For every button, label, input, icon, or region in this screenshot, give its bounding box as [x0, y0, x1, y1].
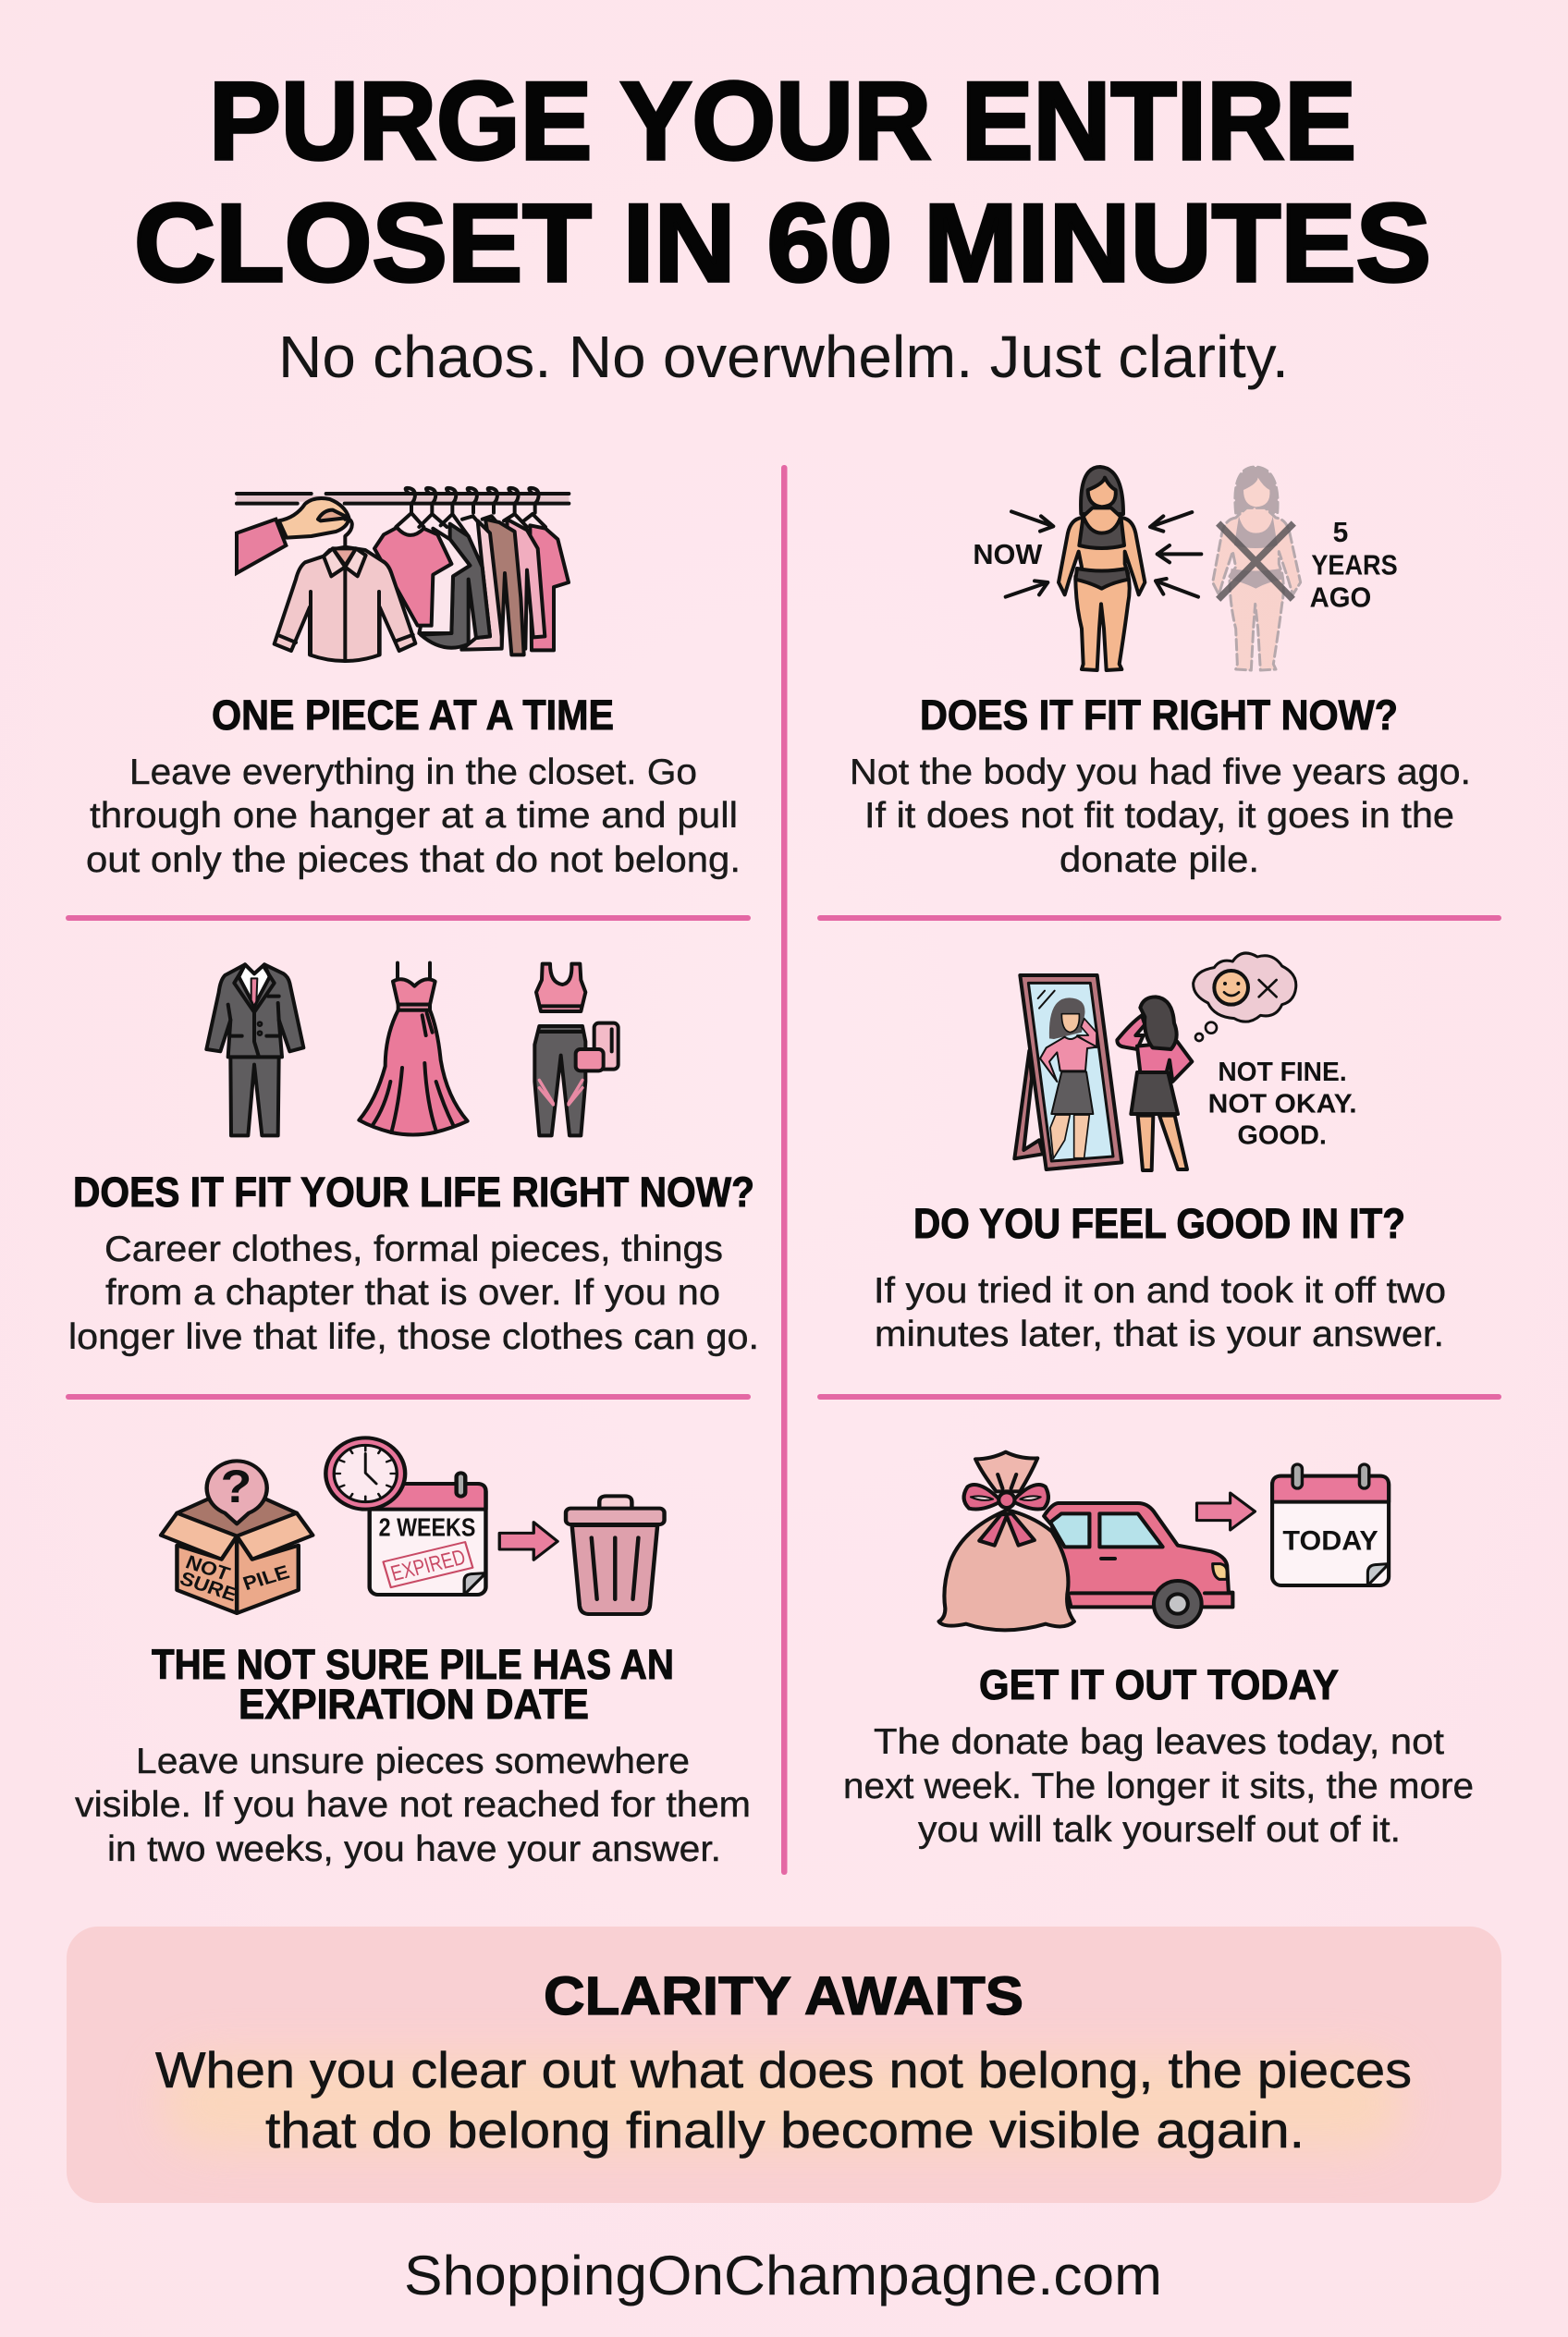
body text: Leave unsure pieces somewhere [136, 1742, 690, 1781]
body text: The donate bag leaves today, not [874, 1722, 1444, 1762]
body text: minutes later, that is your answer. [875, 1315, 1444, 1354]
callout text: When you clear out what does not belong, the pieces [155, 2041, 1412, 2098]
icon: donation bag, car, arrow and today calendar [938, 1452, 1389, 1630]
body text [68, 1230, 759, 1357]
heading: DO YOU FEEL GOOD IN IT? [913, 1200, 1405, 1247]
heading: GET IT OUT TODAY [979, 1661, 1339, 1708]
panel: not sure pile [75, 1438, 751, 1869]
heading [152, 1641, 674, 1728]
callout text [155, 2041, 1412, 2159]
panel: does it fit your life [68, 963, 759, 1357]
panel: do you feel good in it [874, 953, 1446, 1354]
horizontal divider row 2 left [66, 1394, 751, 1400]
horizontal divider row 1 left [66, 915, 751, 921]
body text: next week. The longer it sits, the more [843, 1767, 1474, 1806]
body text: longer live that life, those clothes can go. [68, 1317, 759, 1357]
body text: Not the body you had five years ago. [850, 752, 1471, 792]
icon: box, expiring calendar, arrow and trash can: ? [220, 1462, 251, 1512]
website footer: ShoppingOnChampagne.com [404, 2245, 1162, 2306]
body text [874, 1271, 1446, 1354]
icon: box, expiring calendar, arrow and trash can: 2 WEEKS [379, 1514, 475, 1542]
icon: body now versus five years ago [973, 467, 1398, 670]
vertical divider [781, 465, 788, 1875]
icon: body now versus five years ago: NOW [973, 539, 1042, 570]
body text: through one hanger at a time and pull [90, 796, 738, 836]
icon: box, expiring calendar, arrow and trash can: SURE [177, 1567, 240, 1606]
horizontal divider row 1 right [817, 915, 1501, 921]
panel: get it out today [843, 1452, 1474, 1850]
panel: does it fit right now [850, 467, 1471, 880]
heading: THE NOT SURE PILE HAS AN [152, 1641, 674, 1688]
heading: DOES IT FIT RIGHT NOW? [920, 691, 1398, 739]
icon: donation bag, car, arrow and today calendar: TODAY [1282, 1525, 1378, 1557]
icon: woman at mirror with thought bubble: NOT OKAY. [1208, 1089, 1357, 1119]
horizontal divider row 2 right [817, 1394, 1501, 1400]
title: PURGE YOUR ENTIRE [209, 59, 1356, 183]
body text: out only the pieces that do not belong. [86, 840, 741, 880]
icon: hand pulling shirt from rail [237, 488, 569, 661]
body text [843, 1722, 1474, 1850]
icon: body now versus five years ago: 5 [1333, 517, 1348, 548]
body text: Leave everything in the closet. Go [129, 752, 697, 792]
body text: in two weeks, you have your answer. [107, 1829, 721, 1869]
icon: body now versus five years ago: YEARS [1311, 550, 1398, 581]
icon: box, expiring calendar, arrow and trash can: EXPIRED [388, 1546, 469, 1586]
body text: If it does not fit today, it goes in the [864, 796, 1454, 836]
icon: woman at mirror with thought bubble [1014, 953, 1357, 1170]
title: CLOSET IN 60 MINUTES [134, 181, 1431, 305]
icon: suit, gown and activewear [206, 963, 619, 1135]
body text: you will talk yourself out of it. [918, 1810, 1401, 1850]
icon: woman at mirror with thought bubble: GOOD. [1237, 1120, 1327, 1150]
body text: Career clothes, formal pieces, things [104, 1230, 723, 1269]
icon: box, expiring calendar, arrow and trash can: PILE [239, 1560, 292, 1595]
body text: donate pile. [1060, 840, 1259, 880]
heading: DOES IT FIT YOUR LIFE RIGHT NOW? [73, 1168, 754, 1216]
body text: from a chapter that is over. If you no [105, 1273, 720, 1313]
icon: box, expiring calendar, arrow and trash can: NOT [183, 1550, 234, 1585]
title [134, 59, 1431, 305]
body text [850, 752, 1471, 880]
callout heading: CLARITY AWAITS [544, 1966, 1023, 2026]
callout: clarity awaits [67, 1927, 1501, 2203]
callout text: that do belong finally become visible again. [265, 2101, 1305, 2159]
body text [75, 1742, 751, 1869]
body text: If you tried it on and took it off two [874, 1271, 1446, 1311]
heading: EXPIRATION DATE [239, 1681, 589, 1728]
icon: box, expiring calendar, arrow and trash can [161, 1438, 665, 1614]
body text: visible. If you have not reached for them [75, 1785, 751, 1825]
heading: ONE PIECE AT A TIME [212, 691, 614, 739]
body text [86, 752, 741, 880]
subtitle: No chaos. No overwhelm. Just clarity. [278, 324, 1289, 390]
icon: body now versus five years ago: AGO [1310, 582, 1371, 614]
icon: woman at mirror with thought bubble: NOT FINE. [1218, 1058, 1347, 1087]
panel: one piece at a time [86, 488, 741, 880]
